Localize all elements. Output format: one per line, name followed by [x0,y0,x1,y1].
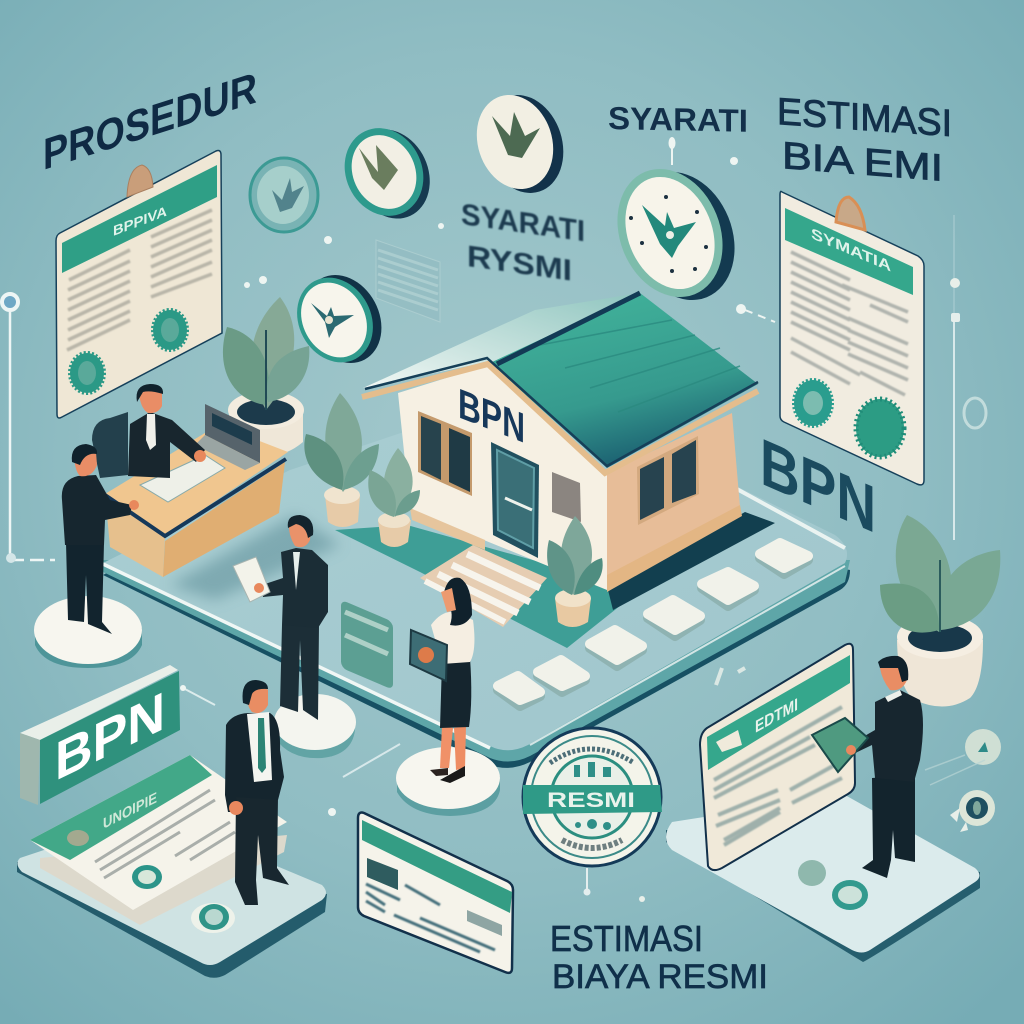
teal entrance ground [335,525,640,648]
tablet [410,630,447,681]
held tablet [812,718,868,772]
desk papers [140,455,225,502]
panel: lower right platform [666,795,980,962]
house plinth [410,508,485,550]
plant: by house left [304,393,379,527]
stamp ribbon label: RESMI [547,789,635,812]
illustration: BPN house [362,293,775,610]
screen home icon [716,730,742,752]
document header label: BPPIVA [113,204,168,240]
heading: ESTIMASI BIAYA RESMI: ESTIMASI [550,918,703,959]
title: PROSEDUR: PROSEDUR [43,62,257,180]
faded list decoration [376,240,440,322]
document header band [785,208,913,295]
plant: by steps [547,516,603,627]
person: seated clerk [92,384,206,478]
document clip [836,197,865,230]
platform disc [34,596,142,668]
connector line left [2,294,55,563]
open document stack [30,755,287,925]
left window [418,411,472,496]
sign label: BPN [55,680,165,793]
header label: UNOIPIE [103,790,157,833]
door [491,442,539,558]
roof white side [363,293,640,388]
heading: ESTIMASI BIAYA RESMI [550,918,768,996]
stamp RESMI [523,728,662,902]
panel: card bottom centre [358,813,513,973]
heading: ESTIMASI BIA EMI: ESTIMASI [777,91,952,145]
stamp ribbon [523,785,662,814]
roof fascia [362,364,758,473]
stepping stones [498,543,808,706]
person: right officer [812,656,923,878]
icons: right side badges [716,668,1001,832]
plant: back left [223,297,309,456]
heading: SYARATI top: SYARATI [608,100,748,139]
plant: large right [880,515,1000,707]
document seal left [794,380,832,426]
house base shadow [608,512,775,610]
heading: SYARATI RESMI middle: SYARATI [461,198,585,248]
card header band [362,820,512,913]
medallion: eagle coin right [465,85,576,203]
panel: lower left platform [17,755,327,978]
screen header label: EDTMI [755,694,798,737]
document text lines [67,210,212,350]
heading: ESTIMASI BIA EMI: BIA EMI [782,135,943,190]
person: standing clerk left [34,444,142,668]
document seal right [153,310,187,350]
medallion: pale coin [250,158,318,232]
panel: document SYARAT [780,191,924,485]
card photo [367,858,398,890]
desk [105,404,288,577]
stamp dots [574,762,611,830]
platform disc [274,694,356,758]
panel: document PROSEDUR [56,150,222,418]
document seal left [70,353,104,393]
medallion: large clock [599,153,753,316]
desk machine [195,404,260,470]
panel: BPN sign [20,665,180,805]
house left wall [398,365,607,590]
heading: ESTIMASI BIA EMI [777,91,952,190]
roof ridge [497,293,640,364]
roof green side [490,293,758,468]
held paper [233,557,270,602]
crest [67,830,89,846]
heading: SYARATI RESMI middle: RYSMI [467,240,572,288]
medallion: clock small [283,261,396,377]
medallion: eagle coin left [331,115,444,231]
desk shadow [170,515,340,600]
person: centre officer with paper [233,515,356,758]
house sign BPN: BPN [458,380,525,453]
person: woman with tablet [396,578,500,816]
wall sign plate [552,472,581,522]
entrance steps [420,545,547,627]
document text lines [791,252,908,395]
document seal right [856,399,904,457]
panel: screen ESTIMASI [700,644,855,870]
platform disc [396,747,500,816]
screen header band [707,655,850,770]
small wallet icon [341,600,393,690]
heading: BPN right: BPN [760,423,876,548]
connector dots [180,137,775,816]
heading: SYARATI RESMI middle [461,198,585,288]
document clip [127,165,153,197]
stamp arc text marks [550,749,634,763]
document header band [62,165,217,273]
heading: ESTIMASI BIAYA RESMI: BIAYA RESMI [552,958,768,996]
connector line right [950,215,986,540]
floor seal [191,903,235,933]
right window [637,436,699,525]
card text lines [366,884,495,952]
plant: by house middle [368,448,420,547]
document header label: SYMATIA [811,226,891,275]
house right wall [607,413,740,580]
screen text lines [714,707,842,845]
seal [132,865,162,889]
panel: main platform [103,400,850,768]
person: front officer [225,680,289,905]
floor seal green [798,860,868,910]
